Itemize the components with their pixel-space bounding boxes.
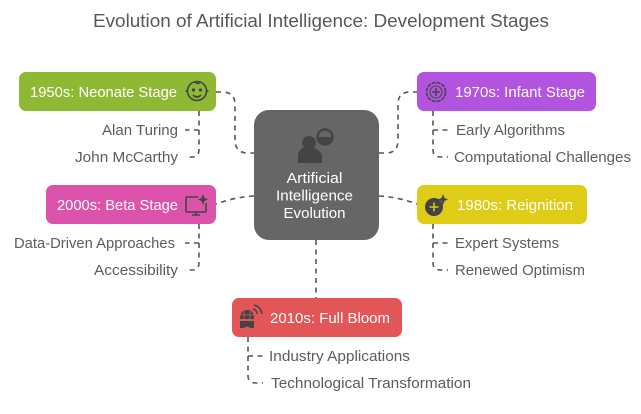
heading: 1970s: 1970s: Infant Stage	[455, 85, 585, 101]
connector: center to 1970s	[379, 92, 417, 153]
heading: 2000s: 2000s: Beta Stage	[57, 198, 178, 214]
heading: 1950s: 1950s: Neonate Stage	[30, 85, 177, 101]
icon: sparkle monitor	[186, 194, 208, 215]
panel: 1950s	[19, 72, 216, 111]
item: Expert Systems: Expert Systems	[455, 236, 559, 252]
connector: center to 2010s	[315, 240, 317, 298]
panel: 1980s	[417, 185, 587, 224]
item: Early Algorithms: Early Algorithms	[456, 123, 565, 139]
panel: 2000s	[46, 185, 216, 224]
item: Technological Transformation: Technological Transformation	[271, 376, 471, 392]
icon: circuit gear	[426, 82, 446, 102]
item: Alan Turing: Alan Turing	[102, 123, 178, 139]
connector: center to 2000s	[216, 196, 254, 204]
item: Industry Applications: Industry Applications	[269, 349, 410, 365]
item: John McCarthy: John McCarthy	[75, 150, 179, 166]
item: Accessibility: Accessibility	[94, 263, 179, 279]
connector: center to 1980s	[379, 196, 417, 204]
item: Renewed Optimism: Renewed Optimism	[455, 263, 585, 279]
item: Data-Driven Approaches: Data-Driven Approaches	[14, 236, 175, 252]
items: 1980s	[433, 224, 585, 279]
connector: center to 1950s	[216, 92, 254, 153]
panel: 1970s	[417, 72, 596, 111]
items: 1950s	[75, 111, 199, 166]
heading: 2010s: 2010s: Full Bloom	[270, 311, 390, 327]
icon: baby face	[186, 82, 208, 100]
items: 1970s	[433, 111, 631, 166]
center label: Intelligence	[276, 188, 353, 204]
heading: 1980s: 1980s: Reignition	[457, 198, 573, 214]
items: 2000s	[14, 224, 199, 279]
center label: Evolution	[284, 206, 346, 222]
item: Computational Challenges: Computational Challenges	[454, 150, 631, 166]
icon: connected robot	[240, 305, 262, 328]
title: Evolution of Artificial Intelligence: Development Stages	[93, 11, 549, 31]
items: 2010s	[248, 337, 471, 392]
panel: center node	[254, 110, 379, 240]
panel: 2010s	[232, 298, 402, 337]
center label: Artificial	[286, 171, 342, 187]
icon: person with gear	[298, 130, 332, 163]
icon: sparkle plus	[425, 194, 448, 216]
